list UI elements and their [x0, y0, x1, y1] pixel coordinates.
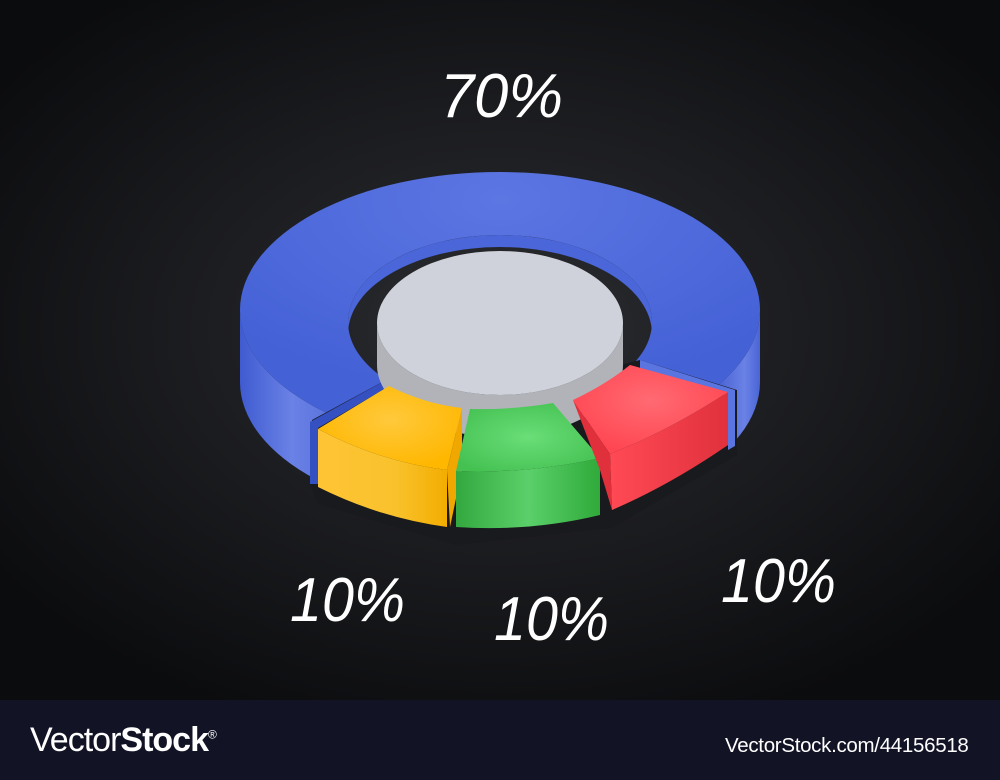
- segment: green 10%: [456, 403, 600, 528]
- footer url: VectorStock.com/44156518: [725, 734, 969, 757]
- label 10% red: 10%: [721, 547, 836, 616]
- label 10% green: 10%: [494, 585, 609, 654]
- blue ring 70%: [240, 172, 760, 545]
- gray center cylinder: [377, 251, 623, 437]
- label 70%: 70%: [440, 62, 563, 131]
- footer logo: VectorStock®: [30, 721, 216, 759]
- footer bar: [0, 700, 1000, 780]
- segment: red 10%: [573, 365, 728, 510]
- label 10% yellow: 10%: [290, 566, 405, 635]
- segment: yellow 10%: [318, 386, 462, 527]
